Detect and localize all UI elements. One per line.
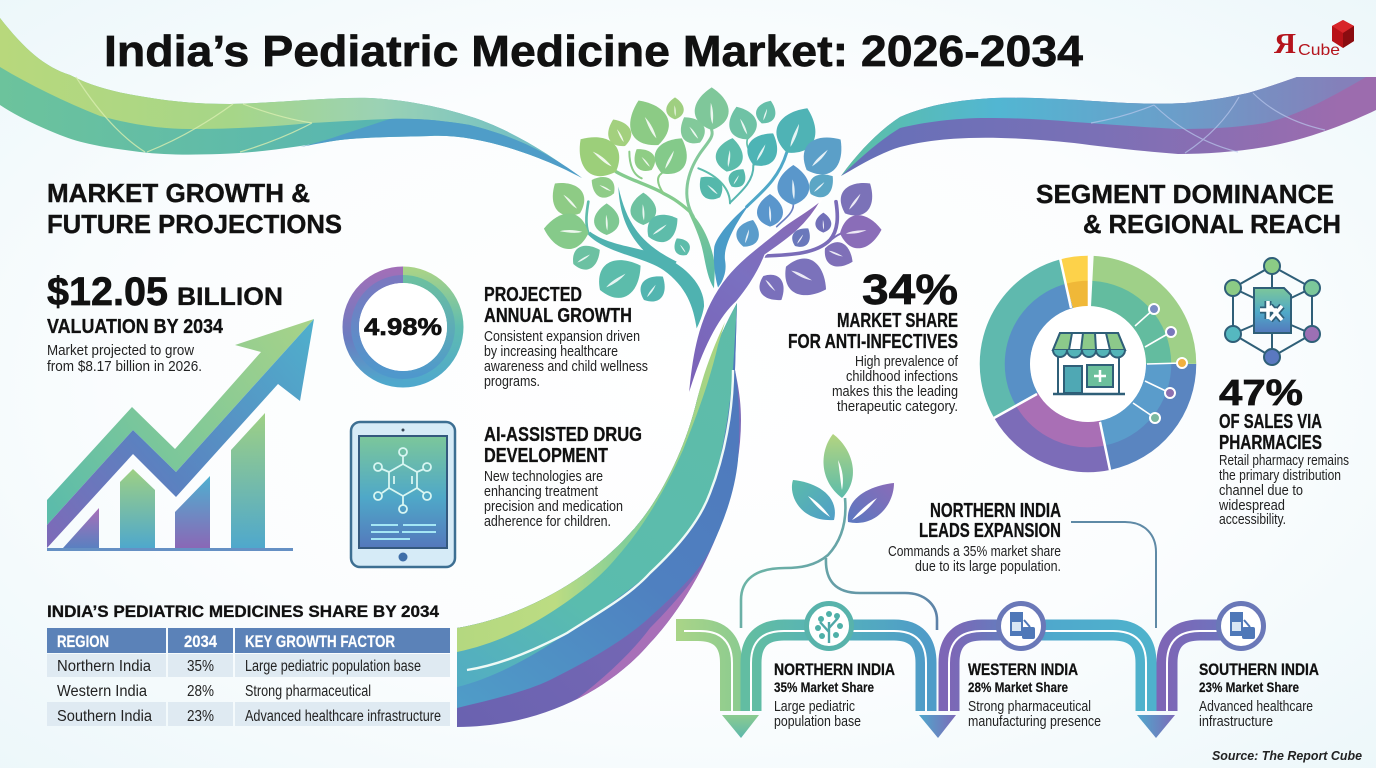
- heading: segment dominance: & REGIONAL REACH: [1083, 209, 1341, 239]
- region label: southern india: 23% Market Share: [1199, 680, 1299, 695]
- heading: market growth: FUTURE PROJECTIONS: [47, 209, 342, 239]
- heading: segment dominance: SEGMENT DOMINANCE: [1036, 179, 1334, 209]
- donut leader dots: [1133, 304, 1187, 423]
- stat: 34% anti-infectives: makes this the leading: [832, 384, 958, 400]
- table row: Southern India: [47, 702, 450, 726]
- stat: 34% anti-infectives: therapeutic category.: [837, 399, 958, 415]
- text: AI-assisted drug development: precision and medication: [484, 499, 623, 515]
- stat: 47% via pharmacies: PHARMACIES: [1219, 432, 1322, 454]
- stat: 47% via pharmacies: accessibility.: [1219, 512, 1286, 528]
- tree teal trunk: [588, 187, 704, 328]
- node icon: northern: [806, 604, 852, 648]
- heading: market growth: MARKET GROWTH &: [47, 178, 310, 208]
- stat: 47% via pharmacies: 47%: [1219, 372, 1303, 413]
- donut inner ring: [992, 268, 1184, 460]
- region label: western india: manufacturing presence: [968, 714, 1101, 730]
- donut: 4.98%: 4.98%: [364, 314, 442, 341]
- text: AI-assisted drug development: adherence for children.: [484, 514, 611, 530]
- region label: western india: 28% Market Share: [968, 680, 1068, 695]
- stat: 47% via pharmacies: [1218, 372, 1349, 528]
- stat: 34% anti-infectives: [788, 266, 959, 415]
- table header: REGION: [57, 632, 109, 651]
- chart: rising arrow and bars: [47, 319, 314, 551]
- tree leaves: [542, 87, 883, 308]
- table: share by 2034: [47, 602, 450, 726]
- stat: valuation: BILLION: [177, 283, 283, 311]
- text: AI-assisted drug development: enhancing treatment: [484, 484, 598, 500]
- table row: Western India: Strong pharmaceutical: [245, 683, 371, 700]
- node icon: western: [998, 604, 1044, 648]
- text: projected annual growth: by increasing healthcare: [484, 344, 618, 360]
- logo: Cube: [1298, 42, 1340, 59]
- title: India’s Pediatric Medicine Market: 2026-2034: [104, 27, 1084, 76]
- text: AI-assisted drug development: AI-ASSISTED DRUG: [484, 424, 642, 446]
- top-left ribbon: [0, 18, 582, 178]
- icon: pharmacy storefront: [1053, 333, 1125, 394]
- stat: 47% via pharmacies: widespread: [1218, 498, 1285, 514]
- table header: 2034: [184, 632, 217, 651]
- region label: western india: Strong pharmaceutical: [968, 699, 1091, 715]
- region label: northern india: 35% Market Share: [774, 680, 874, 695]
- text: AI-assisted drug development: DEVELOPMENT: [484, 445, 608, 467]
- heading: segment dominance: [1036, 179, 1341, 239]
- table row: Western India: Western India: [57, 683, 147, 700]
- table row: Northern India: 35%: [187, 658, 214, 675]
- text: AI-assisted drug development: [484, 424, 642, 530]
- region label: northern india: population base: [774, 714, 861, 730]
- text: northern india leads expansion: [888, 500, 1061, 575]
- table row: Southern India: Southern India: [57, 708, 152, 725]
- text: projected annual growth: PROJECTED: [484, 284, 582, 306]
- table title: INDIA’S PEDIATRIC MEDICINES SHARE BY 2034: [47, 602, 440, 621]
- region label: western india: WESTERN INDIA: [968, 660, 1078, 679]
- stat: 47% via pharmacies: OF SALES VIA: [1219, 411, 1322, 433]
- big swoosh trunk: [457, 303, 741, 727]
- text: northern india leads expansion: NORTHERN INDIA: [930, 500, 1061, 522]
- text: projected annual growth: programs.: [484, 374, 540, 390]
- tree purple trunk: [688, 199, 822, 398]
- icon: pharmacy network: [1225, 258, 1320, 365]
- stat: 34% anti-infectives: FOR ANTI-INFECTIVES: [788, 331, 958, 353]
- top-right ribbon: [841, 77, 1376, 176]
- text: northern india leads expansion: Commands a 35% market share: [888, 544, 1061, 560]
- icon: tablet with molecule: [351, 422, 455, 567]
- table header: [47, 628, 450, 653]
- region label: northern india: Large pediatric: [774, 699, 855, 715]
- region label: southern india: [1199, 660, 1319, 730]
- region label: western india: [968, 660, 1101, 730]
- stat: valuation: [47, 270, 283, 375]
- logo: [1274, 20, 1354, 60]
- tree centre trunk: [687, 203, 750, 288]
- node icon: southern: [1218, 604, 1264, 648]
- text: projected annual growth: awareness and child wellness: [484, 359, 648, 375]
- text: projected annual growth: ANNUAL GROWTH: [484, 305, 632, 327]
- table row: Southern India: 23%: [187, 708, 214, 725]
- tree: [542, 87, 883, 398]
- stat: 34% anti-infectives: MARKET SHARE: [837, 310, 958, 332]
- pipeline flow: [676, 604, 1264, 738]
- pipe: teal to blue: [751, 630, 956, 738]
- stat: 34% anti-infectives: High prevalence of: [855, 354, 959, 370]
- table header: KEY GROWTH FACTOR: [245, 632, 395, 651]
- table row: Northern India: [47, 654, 450, 677]
- text: projected annual growth: Consistent expansion driven: [484, 329, 640, 345]
- region label: northern india: NORTHERN INDIA: [774, 660, 895, 679]
- pipe: purple to blue: [949, 630, 1175, 738]
- text: northern india leads expansion: LEADS EXPANSION: [919, 520, 1061, 542]
- stat: 34% anti-infectives: childhood infections: [846, 369, 958, 385]
- table row: Southern India: Advanced healthcare infrastructure: [245, 708, 441, 725]
- logo: Я: [1274, 29, 1296, 60]
- stat: valuation: Market projected to grow: [47, 343, 194, 359]
- text: AI-assisted drug development: New technologies are: [484, 469, 603, 485]
- tree branches: [586, 130, 843, 256]
- table row: Western India: [57, 683, 371, 700]
- region label: southern india: SOUTHERN INDIA: [1199, 660, 1319, 679]
- donut outer ring: [958, 234, 1218, 494]
- text: projected annual growth: [484, 284, 648, 390]
- donut: 4.98%: [347, 271, 459, 383]
- pipe: green: [676, 630, 759, 738]
- table row: Northern India: Northern India: [57, 658, 151, 675]
- donut chart: sales channels: [958, 234, 1218, 494]
- region label: southern india: infrastructure: [1199, 714, 1273, 730]
- region label: northern india: [774, 660, 895, 730]
- stat: valuation: $12.05: [47, 270, 168, 314]
- pipe: purple: [1167, 630, 1240, 711]
- stat: valuation: from $8.17 billion in 2026.: [47, 359, 202, 375]
- source note: Source: The Report Cube: [1212, 749, 1362, 763]
- connector line to southern india: [1071, 522, 1156, 628]
- stat: 34% anti-infectives: 34%: [862, 266, 958, 314]
- stat: 47% via pharmacies: the primary distribution: [1219, 468, 1341, 484]
- text: northern india leads expansion: due to its large population.: [915, 559, 1061, 575]
- stat: valuation: VALUATION BY 2034: [47, 315, 224, 338]
- table row: Northern India: Large pediatric population base: [245, 658, 421, 675]
- sprout with connectors: [741, 434, 937, 630]
- stat: 47% via pharmacies: Retail pharmacy remains: [1219, 453, 1349, 469]
- heading: market growth: [47, 178, 342, 239]
- stat: 47% via pharmacies: channel due to: [1219, 483, 1303, 499]
- region label: southern india: Advanced healthcare: [1199, 699, 1313, 715]
- table row: Western India: 28%: [187, 683, 214, 700]
